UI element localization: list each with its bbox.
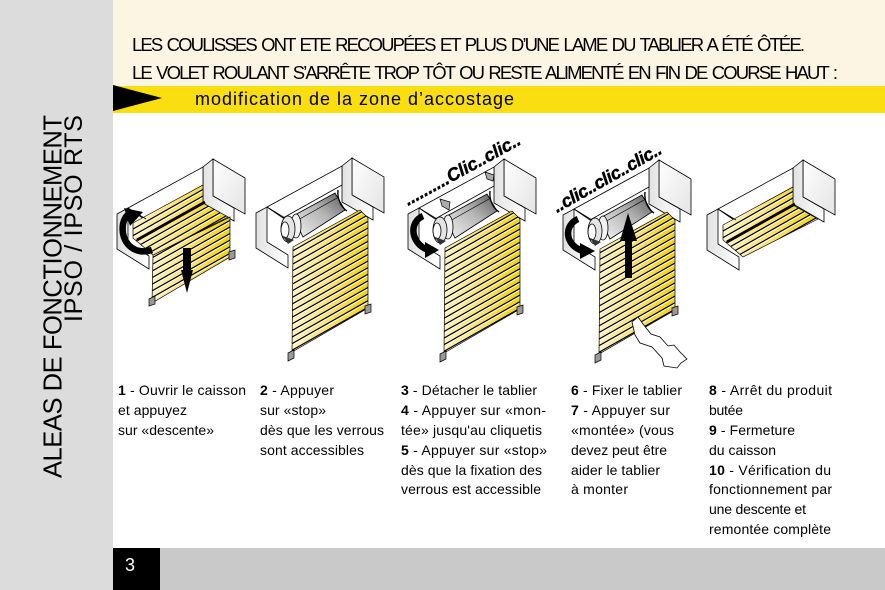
step text 3 to 5: 5 - Appuyer sur «stop» [401,442,547,458]
step text 2: sur «stop» [260,402,326,418]
step text 8 to 10 [709,382,832,537]
step text 3 to 5: 3 - Détacher le tablier [401,382,537,398]
illustration 5: closed box with shutter rolled up [707,160,835,270]
step text 2: dès que les verrous [260,422,384,438]
illustration 3: detaching the shutter [400,130,536,362]
illustration 1: opening the box [117,159,245,306]
sidebar background [0,0,113,590]
step text 2: 2 - Appuyer [260,382,334,398]
step text 3 to 5: 4 - Appuyer sur «mon- [401,402,546,418]
sound label: clic: ..........Clic..clic.. [400,130,524,210]
yellow subtitle band [113,85,885,113]
step text 2: sont accessibles [260,442,364,458]
step text 1: 1 - Ouvrir le caisson [118,382,246,398]
heading [132,34,838,83]
step text 6 to 7: 6 - Fixer le tablier [571,382,682,398]
step text 8 to 10: 9 - Fermeture [709,422,795,438]
step text 3 to 5: verrous est accessible [401,481,541,497]
header background [113,0,885,86]
step text 6 to 7 [571,382,682,497]
step text 1: sur «descente» [118,422,214,438]
heading: LES COULISSES ONT ETE RECOUPÉES ET PLUS D’UNE LAME DU TABLIER A ÉTÉ ÔTÉE. [132,34,805,55]
sidebar title [40,115,88,478]
step text 3 to 5 [401,382,547,497]
step text 1 [118,382,246,438]
yellow subtitle band: modification de la zone d’accostage [195,89,514,109]
illustration 2: roller with shutter [256,158,384,361]
step text 8 to 10: remontée complète [709,521,831,537]
step text 6 to 7: aider le tablier [571,462,660,478]
step text 8 to 10: 10 - Vérification du [709,462,831,478]
step text 6 to 7: à monter [571,481,628,497]
illustration 4: fixing the shutter and raising [549,139,691,368]
step text 1: et appuyez [118,402,187,418]
step text 6 to 7: «montée» (vous [571,422,674,438]
step text 8 to 10: fonctionnement par [709,481,832,497]
page number [113,548,160,590]
step text 6 to 7: 7 - Appuyer sur [571,402,670,418]
sound label: clic: ..clic..clic..clic.. [549,139,665,216]
hand [632,317,687,368]
step text 6 to 7: devez peut être [571,442,667,458]
step text 8 to 10: une descente et [709,501,806,517]
step text 2 [260,382,384,458]
step text 8 to 10: butée [709,402,743,418]
step text 3 to 5: dès que la fixation des [401,462,542,478]
sidebar title: IPSO / IPSO RTS [60,115,88,322]
step text 8 to 10: du caisson [709,442,776,458]
heading: LE VOLET ROULANT S’ARRÊTE TROP TÔT OU RESTE ALIMENTÉ EN FIN DE COURSE HAUT : [132,62,838,83]
footer band [113,548,885,590]
step text 8 to 10: 8 - Arrêt du produit [709,382,832,398]
sidebar title: ALEAS DE FONCTIONNEMENT [40,115,68,478]
page number: 3 [125,555,135,575]
step text 3 to 5: tée» jusqu'au cliquetis [401,422,542,438]
